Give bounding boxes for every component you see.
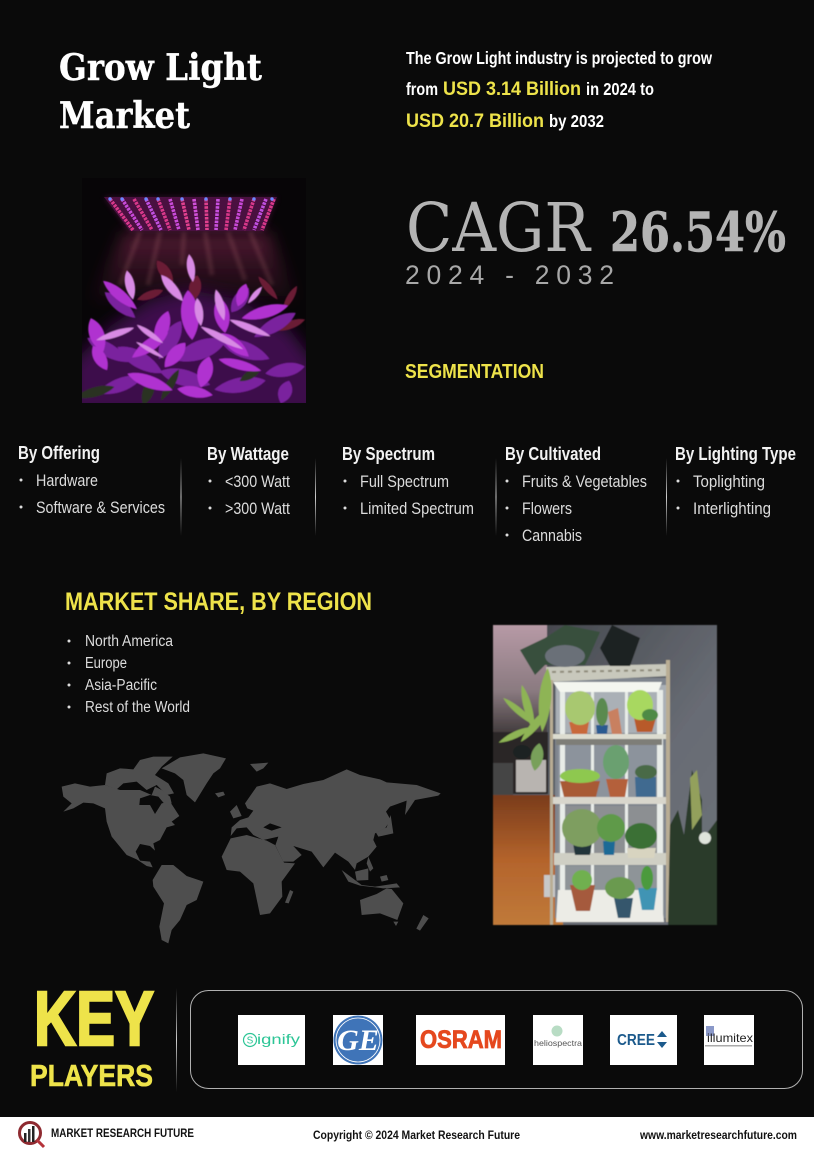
projection text: USD 3.14 Billion — [443, 78, 581, 100]
logo: Signify: S — [247, 1036, 254, 1046]
column: By Cultivated — [505, 443, 647, 545]
Southeast Asia — [342, 870, 400, 888]
projection text: USD 20.7 Billion — [406, 110, 544, 132]
logo: heliospectra — [533, 1015, 583, 1065]
column: By Spectrum: By Spectrum — [342, 443, 435, 464]
region list: Asia-Pacific — [85, 677, 157, 694]
South America — [153, 865, 203, 943]
projection text: The Grow Light industry is projected to grow — [406, 48, 712, 68]
Japan — [376, 815, 393, 837]
column: By Wattage: <300 Watt — [225, 473, 290, 491]
column: By Offering: Hardware — [36, 472, 98, 490]
plant — [82, 254, 306, 403]
logo: heliospectra: heliospectra — [534, 1038, 582, 1048]
region list — [68, 633, 190, 716]
Africa — [222, 835, 295, 915]
projection text — [406, 48, 712, 132]
column: By Offering: By Offering — [18, 442, 100, 463]
LED panel — [104, 197, 277, 231]
column: By Cultivated: By Cultivated — [505, 443, 601, 464]
column: By Cultivated: Flowers — [522, 500, 572, 518]
plants on shelves — [560, 690, 658, 899]
title: Grow Light — [59, 47, 262, 89]
key players heading: PLAYERS — [30, 1058, 153, 1093]
logo: Illumitex: illumitex — [707, 1031, 753, 1045]
light box — [555, 678, 667, 918]
photo: grow light panel over plants — [82, 195, 306, 403]
projection text: in 2024 to — [586, 79, 654, 99]
top plants — [520, 625, 640, 675]
logo: Signify — [238, 1015, 305, 1065]
column: By Lighting Type: Toplighting — [693, 473, 765, 491]
footer — [0, 1117, 814, 1150]
footer: Copyright © 2024 Market Research Future — [313, 1128, 520, 1142]
column: By Wattage: By Wattage — [207, 443, 289, 464]
column: By Offering: Software & Services — [36, 499, 165, 517]
column: By Cultivated: Cannabis — [522, 527, 582, 545]
Iceland — [215, 792, 225, 797]
pots — [560, 708, 657, 918]
New Zealand — [416, 915, 429, 931]
light rays — [92, 232, 296, 300]
region list: Rest of the World — [85, 699, 190, 716]
logo: GE — [333, 1015, 383, 1065]
Eurasia — [231, 769, 441, 870]
column: By Wattage: >300 Watt — [225, 500, 290, 518]
key players panel — [190, 990, 802, 1088]
key players heading — [30, 976, 154, 1093]
snake plant — [668, 770, 717, 925]
title — [59, 47, 262, 137]
CAGR figure — [405, 189, 786, 290]
column: By Spectrum: Limited Spectrum — [360, 500, 474, 518]
logo: OSRAM — [416, 1015, 505, 1065]
footer logo icon — [20, 1122, 44, 1147]
column: By Cultivated: Fruits & Vegetables — [522, 473, 647, 491]
CAGR figure: CAGR — [406, 189, 592, 267]
Arctic islands — [105, 757, 174, 795]
logo: Signify: ignify — [257, 1031, 300, 1047]
region list: North America — [85, 633, 173, 650]
logo: OSRAM: OSRAM — [420, 1026, 502, 1054]
Australia — [360, 888, 403, 920]
hanging plant — [497, 668, 554, 772]
Madagascar — [285, 890, 293, 903]
CAGR figure: 2024 - 2032 — [405, 260, 614, 290]
United Kingdom — [230, 805, 242, 818]
segmentation columns — [18, 442, 796, 545]
logo: CREE — [610, 1015, 677, 1065]
photo: plant shelf — [493, 625, 717, 925]
column: By Lighting Type: Interlighting — [693, 500, 771, 518]
segmentation heading: SEGMENTATION — [405, 361, 544, 383]
footer: MARKET RESEARCH FUTURE — [51, 1126, 194, 1140]
Black Sea cut — [263, 823, 282, 831]
column: By Spectrum — [342, 443, 474, 518]
Greenland — [162, 753, 226, 802]
column: By Offering — [18, 442, 165, 517]
shelf frame — [546, 660, 670, 925]
logo: CREE: CREE — [617, 1032, 655, 1049]
Svalbard — [250, 763, 268, 772]
market share heading: MARKET SHARE, BY REGION — [65, 588, 372, 616]
region list: Europe — [85, 655, 127, 672]
title: Market — [59, 95, 190, 137]
projection text: by 2032 — [549, 111, 604, 131]
logo: GE: GE — [337, 1024, 379, 1057]
key players heading: KEY — [34, 976, 154, 1062]
world map — [62, 753, 441, 943]
logo: Illumitex — [704, 1015, 754, 1065]
North America — [62, 783, 179, 867]
column: By Wattage — [207, 443, 290, 518]
column: By Lighting Type — [675, 443, 796, 518]
projection text: from — [406, 79, 438, 99]
column: By Spectrum: Full Spectrum — [360, 473, 449, 491]
